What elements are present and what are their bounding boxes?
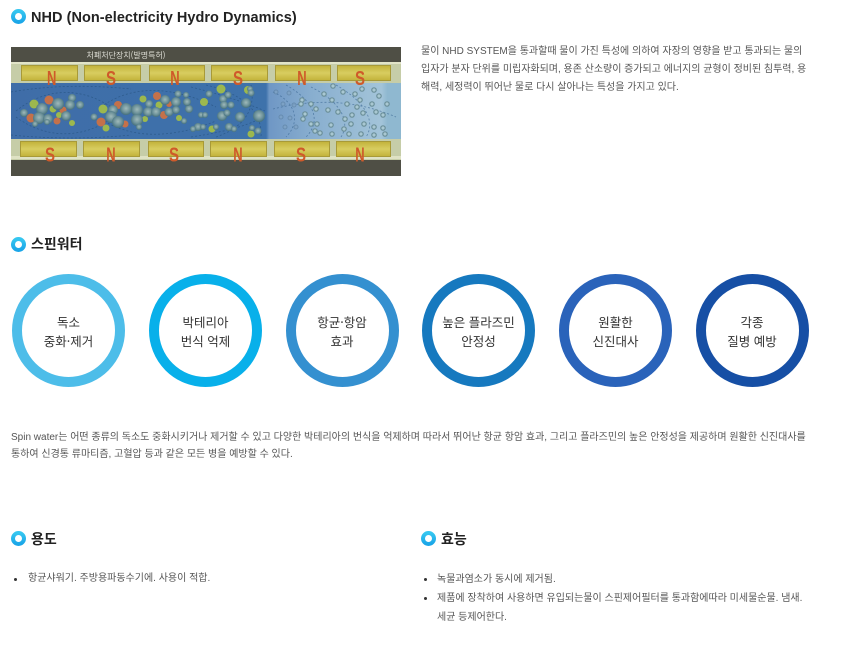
- text block: spin water description: Spin water는 어떤 종류의 독소도 중화시키거나 제거할 수 있고 다양한 박테리아의 번식을 억제하며 따라서 뛰어난 항균 항암 효과, 그리고 플라즈민의 높은 안정성을 제공하며 원활한 신진대사를: [11, 432, 806, 443]
- section: NHD: [11, 9, 806, 176]
- diagram: magnetic water treatment device: [11, 47, 401, 176]
- circle: metabolism: 신진대사: [592, 331, 638, 350]
- text block: NHD description: 입자가 분자 단위를 미립자화되며, 용존 산소량이 증가되고 에너지의 균형이 정비된 침투력, 용: [421, 64, 806, 75]
- circle: bacteria suppression: [149, 274, 262, 387]
- molecule clusters: [20, 84, 389, 138]
- pole letters: S: [45, 143, 55, 166]
- magnets: [20, 66, 390, 156]
- pole letters: N: [170, 67, 180, 90]
- pole letters: N: [47, 67, 56, 90]
- section: spin water: [11, 236, 809, 460]
- pole letters: N: [106, 144, 116, 166]
- icon: heading ring: [11, 9, 26, 24]
- section: usage: [11, 531, 210, 584]
- icon: heading ring: [11, 531, 26, 546]
- circle: plasma stability: [422, 274, 535, 387]
- circle: antibacterial anticancer: [286, 274, 399, 387]
- circle: toxin neutralization: [12, 274, 125, 387]
- circle: toxin neutralization: 독소: [57, 312, 80, 331]
- heading: NHD: NHD (Non-electricity Hydro Dynamics): [31, 10, 297, 26]
- pole letters: N: [233, 144, 243, 166]
- pole letters: S: [355, 67, 365, 90]
- circle: toxin neutralization: 중화·제거: [44, 331, 93, 350]
- heading: effects: 효능: [441, 531, 467, 547]
- circle: disease prevention: [696, 274, 809, 387]
- text block: NHD description: 물이 NHD SYSTEM을 통과할때 물이 가진 특성에 의하여 자장의 영향을 받고 통과되는 물의: [421, 46, 802, 57]
- circle: antibacterial anticancer: 효과: [330, 331, 354, 350]
- pole letters: N: [355, 144, 365, 166]
- list: effect items: [424, 573, 802, 623]
- list: effect items: 제품에 장착하여 사용하면 유입되는물이 스핀제어필터를 통과함에따라 미세물순물. 냄새.: [437, 593, 802, 604]
- text block: spin water description: [11, 431, 806, 460]
- circle: plasma stability: 높은 플라즈민: [442, 312, 515, 331]
- device caption: 처폐처단장치(발명특허): [86, 50, 166, 61]
- list: usage item: 항균샤워기. 주방용파동수기에. 사용이 적합.: [28, 573, 210, 584]
- circle: antibacterial anticancer: 항균·항암: [317, 312, 367, 331]
- circle: bacteria suppression: 박테리아: [182, 312, 228, 331]
- pole letters: S: [296, 143, 306, 166]
- water channel: [11, 83, 401, 139]
- list: effect items: 녹물과염소가 동시에 제거됨.: [437, 574, 556, 585]
- circle: disease prevention: 각종: [740, 312, 764, 331]
- list: effect items: 세균 등제어한다.: [437, 612, 507, 623]
- section: effects: [421, 531, 802, 623]
- heading: spin water: 스핀워터: [31, 236, 83, 252]
- heading: usage: 용도: [31, 531, 57, 547]
- icon: heading ring: [11, 237, 26, 252]
- text block: NHD description: [421, 45, 806, 93]
- circle: plasma stability: 안정성: [461, 331, 496, 350]
- text block: NHD description: 해력, 세정력이 뛰어난 물로 다시 살아나는 특성을 가지고 있다.: [421, 82, 679, 93]
- pole letters: S: [106, 67, 116, 90]
- text block: spin water description: 통하여 신경통 류마티즘, 고혈압 등과 같은 모든 병을 예방할 수 있다.: [11, 449, 293, 460]
- circle: metabolism: 원활한: [598, 312, 633, 331]
- circle: metabolism: [559, 274, 672, 387]
- pole letters: S: [169, 143, 179, 166]
- circle: bacteria suppression: 번식 억제: [181, 331, 230, 350]
- icon: heading ring: [421, 531, 436, 546]
- pole letters: [45, 67, 365, 166]
- pole letters: S: [233, 67, 243, 90]
- pole letters: N: [297, 67, 307, 90]
- circle: disease prevention: 질병 예방: [727, 331, 777, 350]
